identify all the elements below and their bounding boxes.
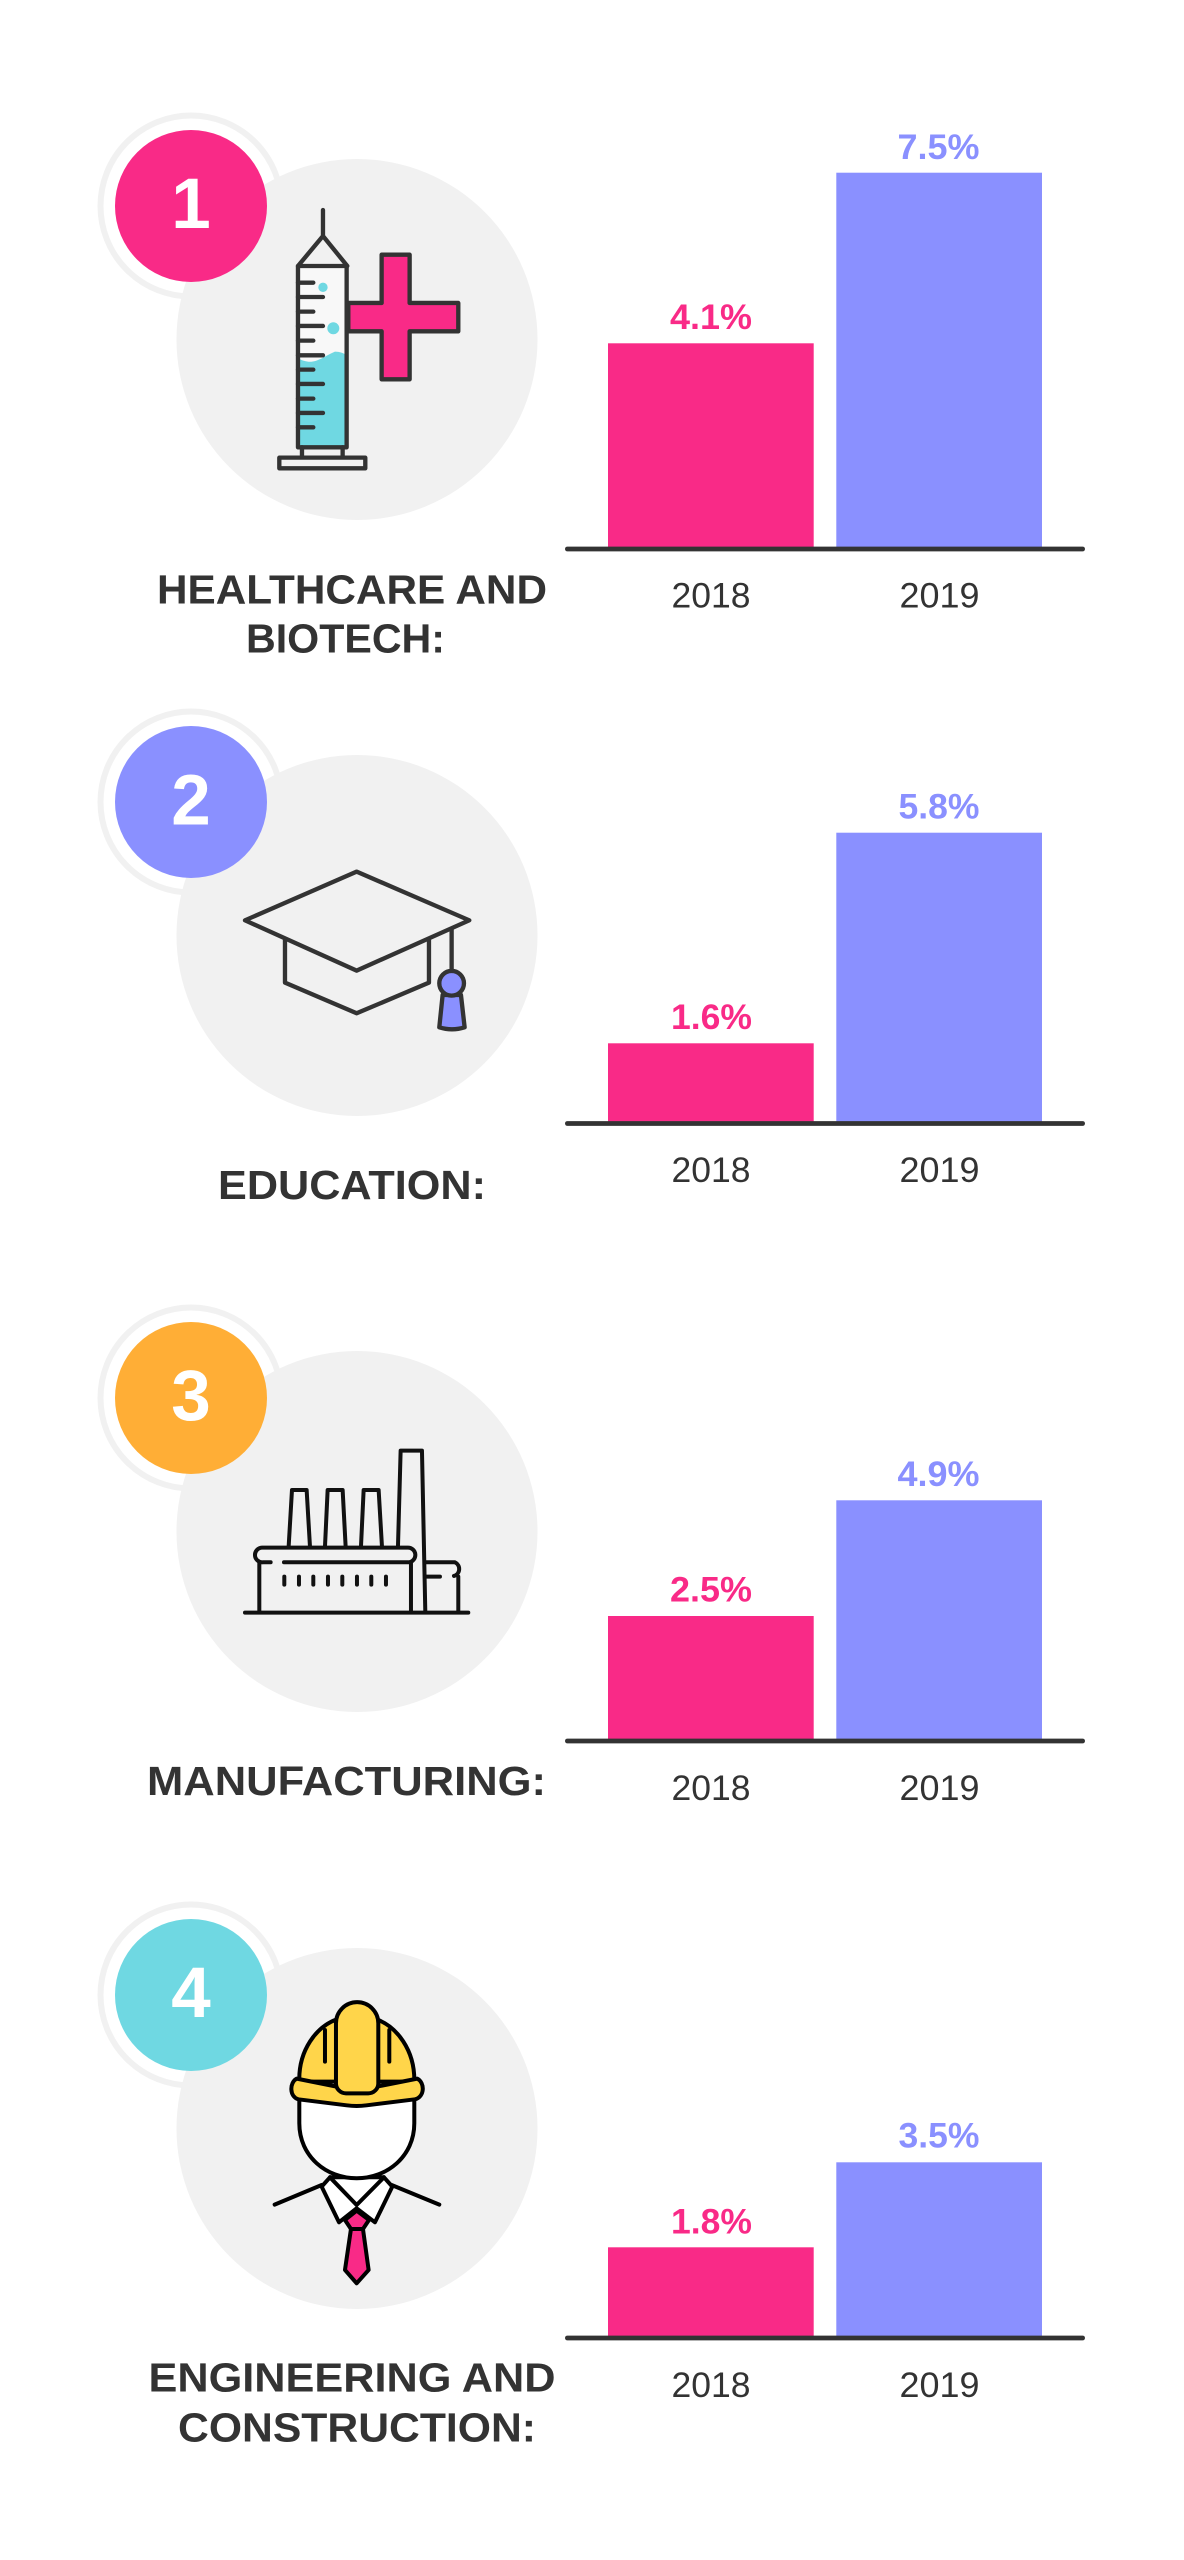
bar 2018 <box>608 343 814 549</box>
value 2018: 1.6% <box>671 998 752 1037</box>
year 2018: 2018 <box>672 1151 750 1190</box>
panel: healthcare and biotech <box>100 116 1085 661</box>
value 2019: 7.5% <box>898 128 980 167</box>
number badge 1: 1 <box>171 165 211 244</box>
bar chart: engineering and construction <box>565 2116 1085 2405</box>
year 2018: 2018 <box>672 577 750 616</box>
year 2019: 2019 <box>900 1769 980 1808</box>
heading: engineering and construction: ENGINEERING AND <box>148 2355 556 2401</box>
year 2019: 2019 <box>900 2366 980 2405</box>
bar chart: education <box>565 787 1085 1190</box>
icon: syringe and medical cross <box>279 210 458 468</box>
number badge 2: 2 <box>171 762 211 840</box>
bar chart: manufacturing <box>565 1455 1085 1808</box>
bar 2019 <box>836 173 1042 549</box>
bar chart: healthcare and biotech <box>565 128 1085 616</box>
number badge 3 <box>100 1308 538 1712</box>
value 2018: 2.5% <box>670 1571 752 1610</box>
heading: manufacturing: MANUFACTURING: <box>147 1758 546 1804</box>
number badge 3: 3 <box>171 1357 211 1436</box>
value 2019: 5.8% <box>898 787 980 826</box>
heading: healthcare and biotech: BIOTECH: <box>246 615 445 661</box>
number badge 4 <box>100 1904 538 2309</box>
heading: engineering and construction <box>148 2355 556 2450</box>
heading: healthcare and biotech: HEALTHCARE AND <box>157 566 547 612</box>
bar 2019 <box>836 2162 1042 2338</box>
heading: healthcare and biotech <box>157 566 547 661</box>
panel: manufacturing <box>100 1308 1085 1808</box>
bar 2019 <box>836 1500 1042 1741</box>
number badge 4: 4 <box>171 1954 211 2033</box>
heading: education: EDUCATION: <box>218 1162 486 1208</box>
bar 2018 <box>608 2247 814 2338</box>
number badge 2 <box>100 712 538 1116</box>
number badge 1 <box>100 116 538 520</box>
year 2018: 2018 <box>672 1769 750 1808</box>
year 2019: 2019 <box>900 577 980 616</box>
bar 2018 <box>608 1616 814 1741</box>
panel: education <box>100 712 1085 1208</box>
icon: construction worker <box>275 2002 439 2283</box>
heading: engineering and construction: CONSTRUCTION: <box>178 2404 536 2450</box>
year 2019: 2019 <box>900 1151 980 1190</box>
value 2018: 1.8% <box>671 2202 752 2241</box>
year 2018: 2018 <box>672 2366 750 2405</box>
bar 2018 <box>608 1043 814 1124</box>
value 2019: 3.5% <box>898 2116 980 2155</box>
panel: engineering and construction <box>100 1904 1085 2450</box>
value 2018: 4.1% <box>670 298 752 337</box>
value 2019: 4.9% <box>898 1455 980 1494</box>
icon: graduation cap <box>245 872 469 1029</box>
bar 2019 <box>836 833 1042 1124</box>
icon: factory <box>245 1451 468 1613</box>
